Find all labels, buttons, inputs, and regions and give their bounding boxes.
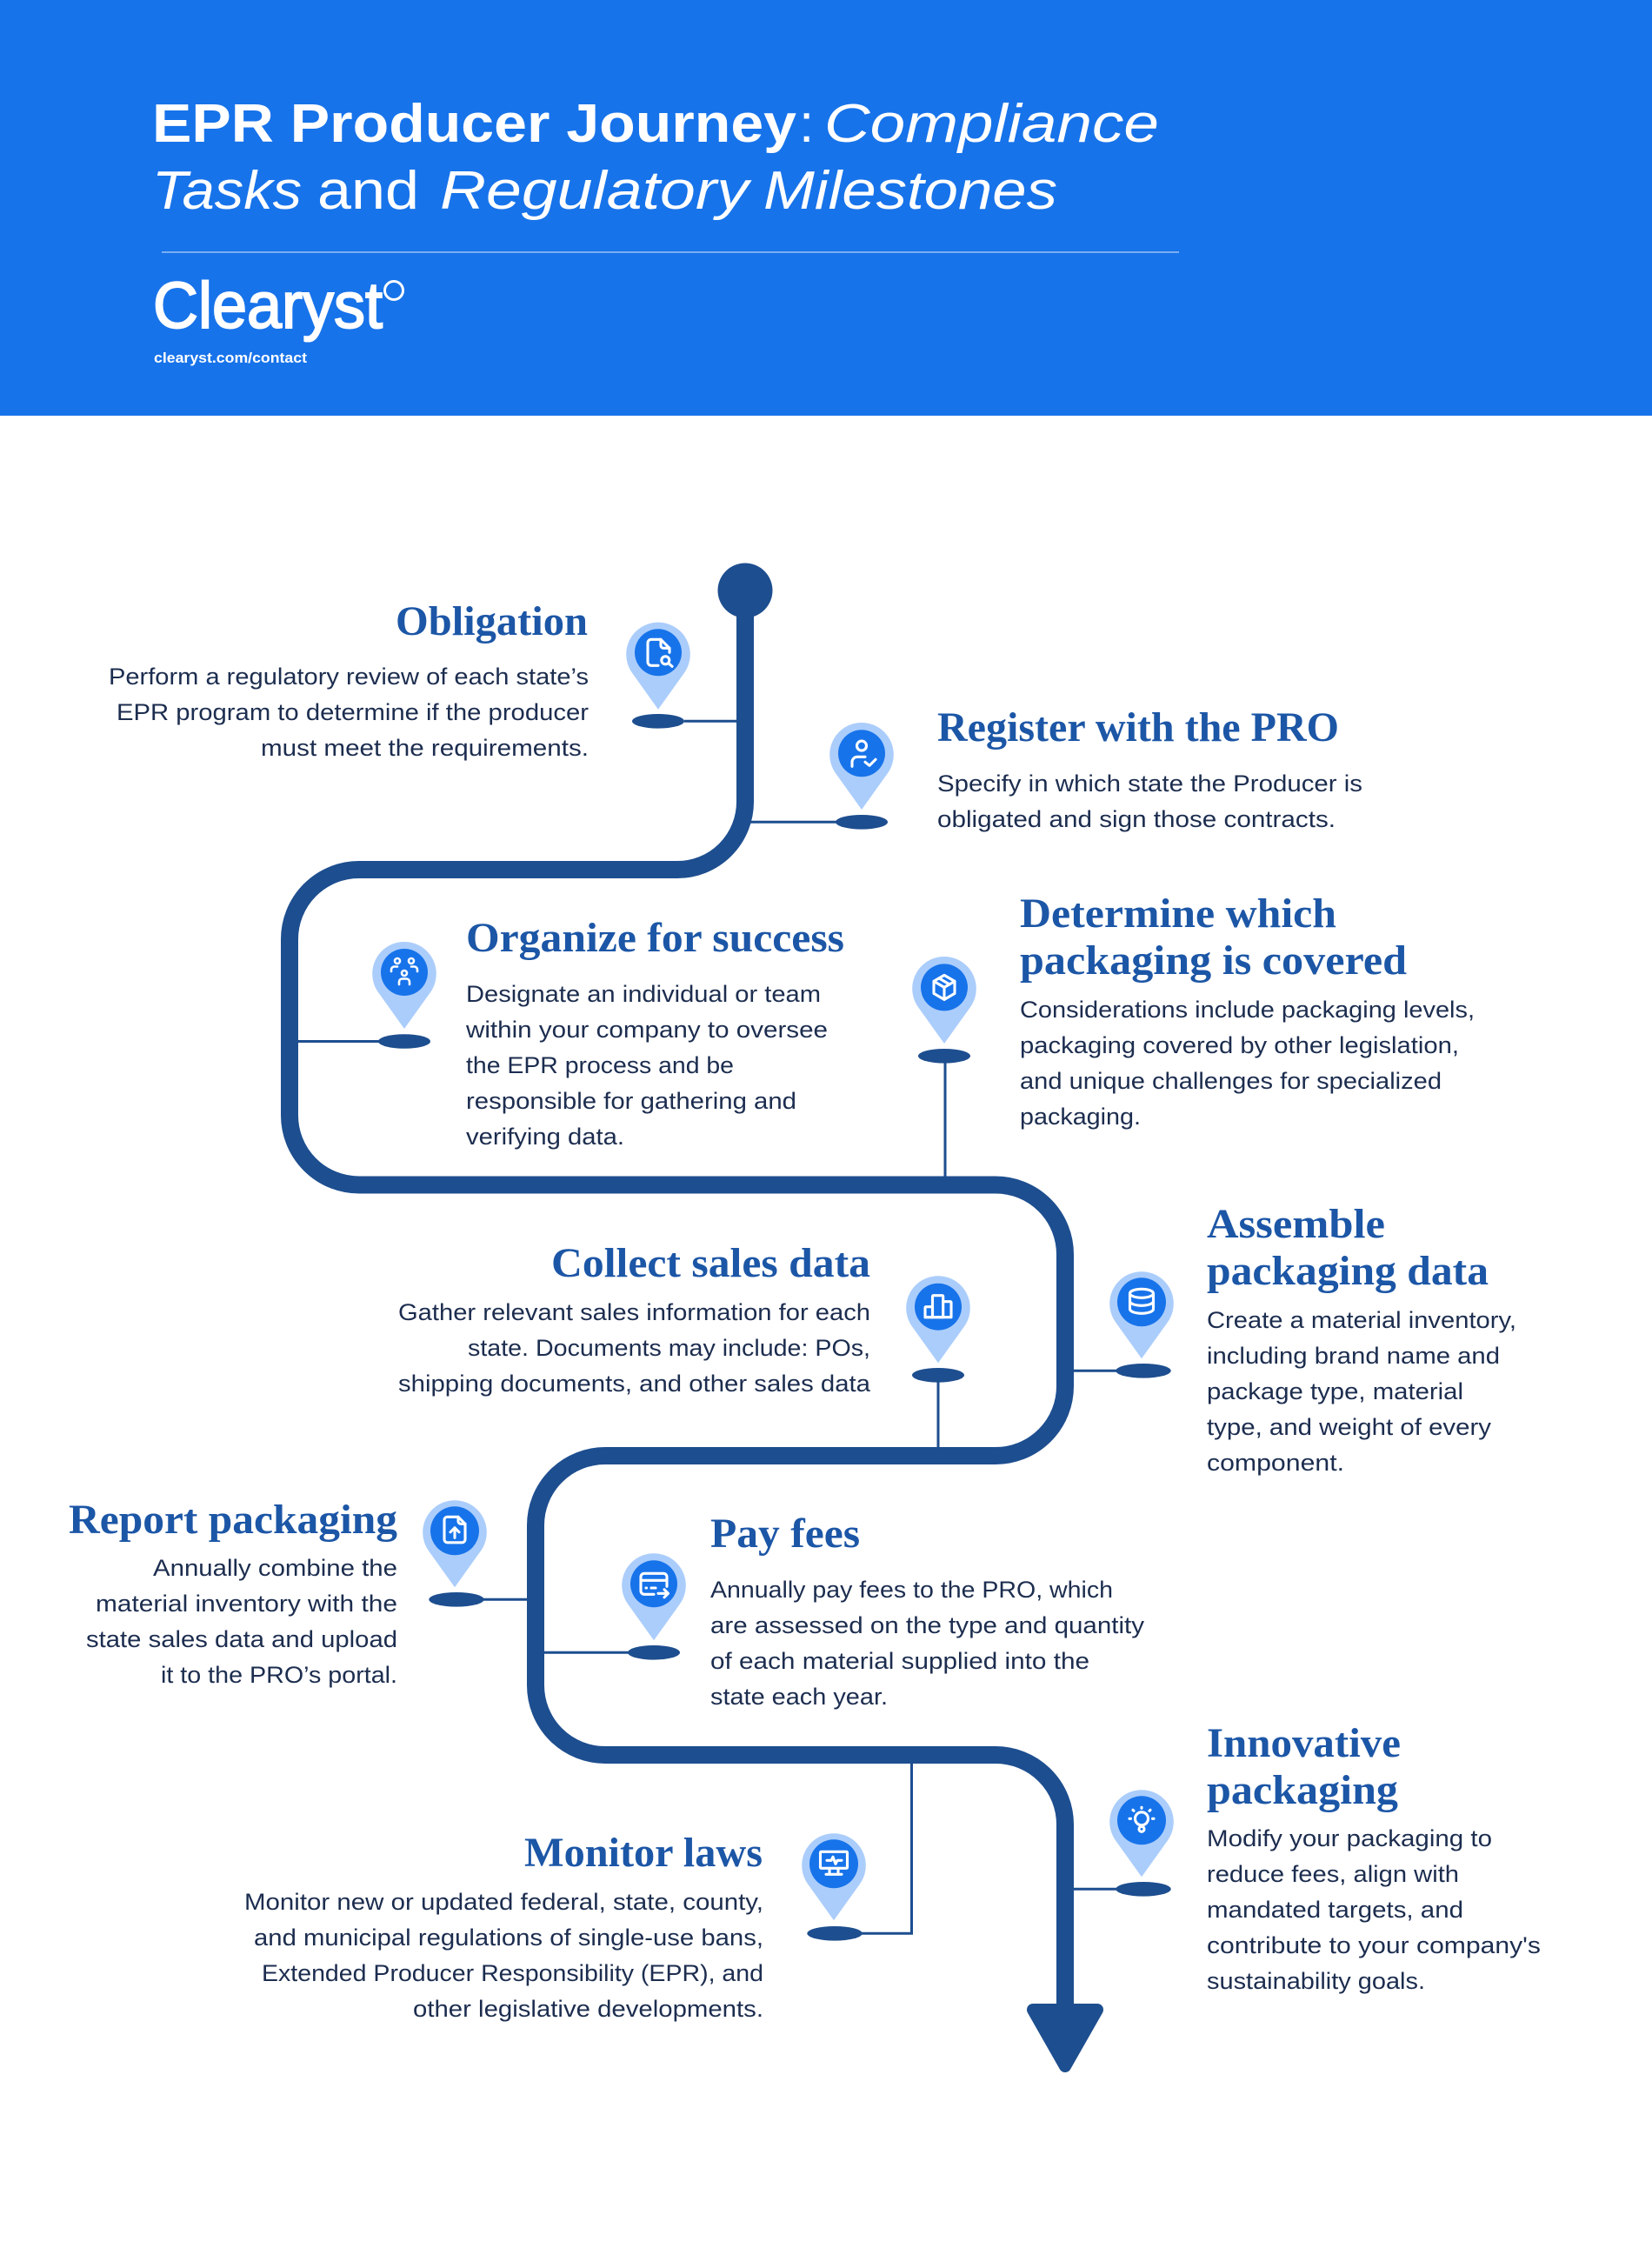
body text: material inventory with the	[96, 1591, 397, 1617]
body text: of each material supplied into the	[710, 1648, 1089, 1674]
step: Organize for success	[372, 915, 844, 1150]
step connectors	[294, 721, 1122, 1933]
body text: must meet the requirements.	[261, 735, 589, 761]
body text: and unique challenges for specialized	[1020, 1068, 1442, 1094]
body text	[710, 1577, 1145, 1710]
step: Pay fees	[622, 1511, 1145, 1710]
body text	[244, 1889, 763, 2022]
step: Collect sales data	[398, 1240, 970, 1397]
body text	[398, 1299, 871, 1397]
title: Compliance	[824, 94, 1159, 154]
heading	[1020, 891, 1407, 984]
pin: document search	[626, 623, 690, 729]
heading: Assemble	[1207, 1201, 1385, 1247]
body text: component.	[1207, 1450, 1344, 1476]
step: Determine which packaging is covered	[912, 891, 1475, 1130]
step: Assemble packaging data	[1109, 1201, 1516, 1476]
body text	[1207, 1307, 1516, 1476]
body text: state each year.	[710, 1684, 888, 1710]
heading: Collect sales data	[551, 1240, 870, 1286]
pin: monitor	[802, 1833, 866, 1941]
body text: verifying data.	[466, 1124, 624, 1150]
body text: it to the PRO’s portal.	[161, 1662, 397, 1688]
body text	[937, 770, 1362, 832]
pin: user check	[829, 723, 894, 830]
body text: type, and weight of every	[1207, 1414, 1492, 1440]
pin: database	[1109, 1271, 1174, 1378]
heading: packaging is covered	[1020, 937, 1407, 984]
pin: team	[372, 942, 436, 1049]
pin: payment card	[622, 1553, 686, 1660]
logo: Clearyst: Clearyst	[153, 269, 383, 342]
body text: Extended Producer Responsibility (EPR), and	[262, 1960, 763, 1986]
body text: packaging.	[1020, 1104, 1141, 1130]
heading: Obligation	[396, 598, 588, 644]
body text: responsible for gathering and	[466, 1088, 796, 1114]
title: :	[799, 94, 814, 154]
body text: including brand name and	[1207, 1343, 1500, 1369]
heading	[1207, 1720, 1401, 1813]
step: Innovative packaging	[1109, 1720, 1541, 1994]
body text: Gather relevant sales information for each	[398, 1299, 870, 1325]
heading: packaging	[1207, 1767, 1398, 1813]
step: Monitor laws	[244, 1830, 866, 2022]
pin: light bulb	[1109, 1790, 1174, 1897]
body text: Modify your packaging to	[1207, 1825, 1492, 1851]
body text: other legislative developments.	[413, 1996, 763, 2022]
body text: Monitor new or updated federal, state, county,	[244, 1889, 763, 1915]
title	[152, 94, 1159, 221]
heading: Report packaging	[69, 1497, 397, 1543]
header banner	[0, 0, 1652, 416]
title: Tasks	[152, 161, 302, 221]
body text: sustainability goals.	[1207, 1968, 1425, 1994]
body text: and municipal regulations of single-use bans,	[254, 1924, 763, 1951]
body text: reduce fees, align with	[1207, 1861, 1459, 1887]
heading: Organize for success	[466, 915, 844, 961]
pin: box	[912, 957, 976, 1064]
heading: packaging data	[1207, 1248, 1489, 1294]
title: EPR Producer Journey	[152, 94, 797, 154]
body text: shipping documents, and other sales data	[398, 1371, 871, 1397]
step: Register with the PRO	[829, 704, 1362, 832]
body text: Considerations include packaging levels,	[1020, 997, 1475, 1023]
heading: Register with the PRO	[937, 704, 1339, 750]
heading	[1207, 1201, 1489, 1294]
body text	[465, 981, 828, 1150]
title: and	[317, 161, 419, 221]
body text: Designate an individual or team	[466, 981, 821, 1007]
body text: package type, material	[1207, 1378, 1463, 1404]
body text	[1020, 997, 1475, 1130]
contact link: clearyst.com/contact	[154, 350, 307, 366]
journey path with start dot and arrowhead	[290, 564, 1097, 2066]
heading: Monitor laws	[524, 1830, 763, 1876]
body text	[86, 1555, 397, 1688]
body text: the EPR process and be	[466, 1052, 734, 1078]
body text: EPR program to determine if the producer	[117, 699, 589, 725]
step: Obligation	[109, 598, 690, 761]
body text	[109, 664, 589, 761]
title: Milestones	[763, 161, 1057, 221]
body text: state sales data and upload	[86, 1626, 397, 1652]
heading: Pay fees	[710, 1511, 860, 1557]
body text: Perform a regulatory review of each state’s	[109, 664, 589, 690]
body text: Create a material inventory,	[1207, 1307, 1516, 1333]
pin: document upload	[423, 1500, 487, 1607]
heading: Innovative	[1207, 1720, 1401, 1766]
body text: packaging covered by other legislation,	[1020, 1032, 1459, 1058]
body text	[1207, 1825, 1541, 1994]
body text: state. Documents may include: POs,	[468, 1335, 870, 1361]
body text: within your company to oversee	[465, 1017, 828, 1043]
body text: obligated and sign those contracts.	[937, 806, 1336, 832]
pin: bar chart	[906, 1276, 970, 1383]
body text: contribute to your company's	[1207, 1932, 1541, 1958]
body text: are assessed on the type and quantity	[710, 1612, 1145, 1638]
body text: Specify in which state the Producer is	[937, 770, 1362, 797]
step: Report packaging	[69, 1497, 487, 1688]
body text: mandated targets, and	[1207, 1897, 1463, 1923]
body text: Annually combine the	[153, 1555, 397, 1581]
heading: Determine which	[1020, 891, 1336, 937]
title: Regulatory	[440, 161, 753, 221]
body text: Annually pay fees to the PRO, which	[710, 1577, 1113, 1603]
